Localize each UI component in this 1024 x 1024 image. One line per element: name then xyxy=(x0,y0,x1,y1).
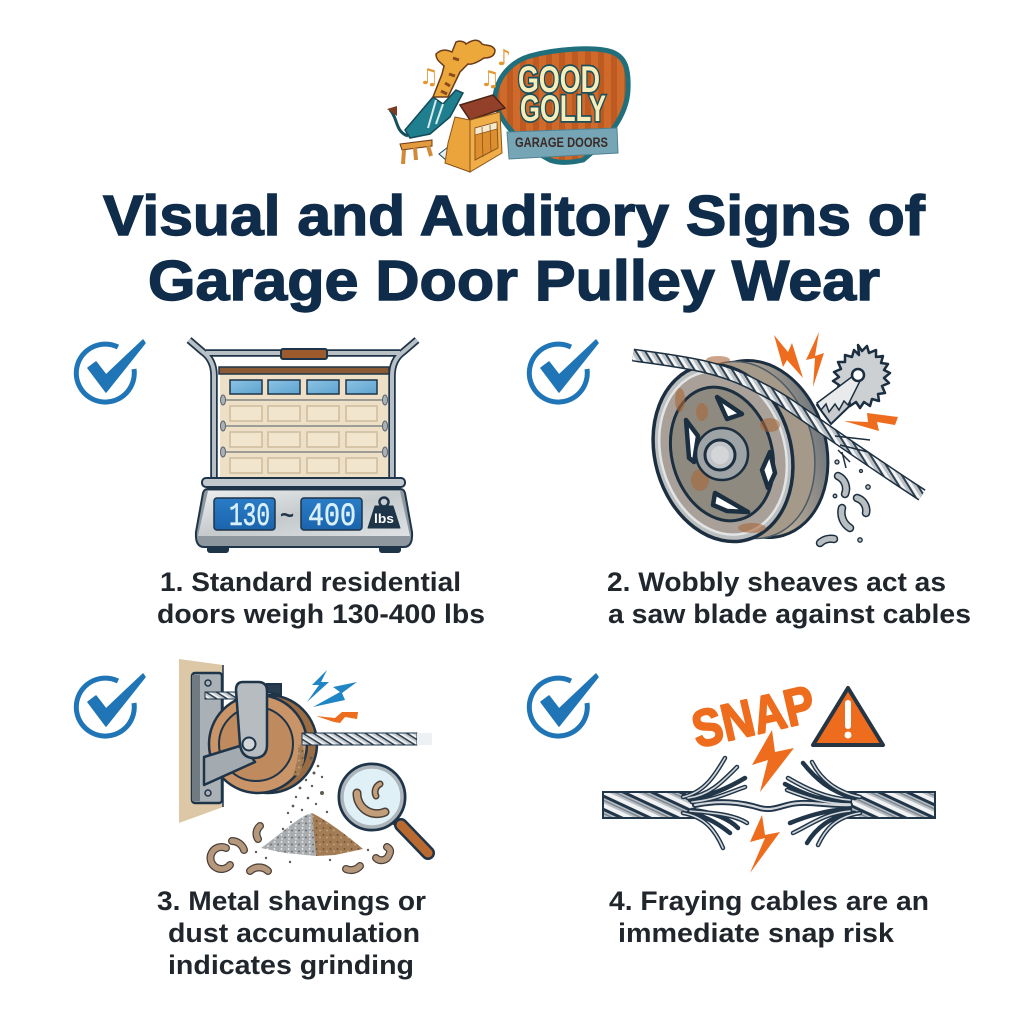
icon: check mark 3 xyxy=(76,674,145,736)
icon: magnifying glass xyxy=(339,764,428,853)
icon: check mark 4 xyxy=(529,674,598,736)
snap label: SNAP xyxy=(687,675,821,760)
icon: pulley on wall bracket xyxy=(179,659,432,823)
icon: frayed cable xyxy=(603,758,935,848)
caption 3: indicates grinding xyxy=(168,950,414,980)
panel 2: wobbly sheaves xyxy=(529,332,971,629)
door windows xyxy=(230,380,377,394)
title: Garage Door Pulley Wear xyxy=(148,249,880,313)
tilde: ~ xyxy=(280,502,294,529)
logo music notes: ♪ xyxy=(497,46,511,71)
icon: noise sparks xyxy=(307,670,358,723)
yoke xyxy=(236,682,267,758)
panel 1: door weight xyxy=(76,340,485,629)
icon: metal fragments xyxy=(820,460,870,543)
caption 4: immediate snap risk xyxy=(618,918,895,948)
logo wordmark xyxy=(518,59,606,129)
panel 4: snap risk xyxy=(529,674,935,948)
dust on pulley xyxy=(293,745,304,776)
icon: pulley wheel xyxy=(633,344,848,558)
icon: sparks xyxy=(774,332,898,431)
wall xyxy=(179,659,223,823)
weight icon lbs: lbs xyxy=(374,511,394,526)
icon: lower lightning xyxy=(750,815,780,873)
wheel hub xyxy=(696,428,748,480)
panel 3: metal shavings xyxy=(76,659,432,980)
yoke arm xyxy=(204,745,255,785)
wheel rust xyxy=(675,356,780,533)
icon: saw blade xyxy=(817,345,890,424)
icon: upper lightning xyxy=(752,730,794,792)
caption 2 xyxy=(607,567,971,629)
icon: falling dust specks xyxy=(255,756,369,863)
scale display low xyxy=(214,498,275,535)
logo music notes: ♫ xyxy=(419,65,439,90)
horizontal cable xyxy=(302,733,417,745)
logo badge xyxy=(495,49,628,162)
caption 4 xyxy=(609,886,929,948)
logo wordmark: GOLLY xyxy=(520,88,606,129)
logo giraffe xyxy=(387,40,495,164)
icon: worn cable xyxy=(633,355,922,495)
door handle bar xyxy=(281,349,327,359)
caption 3: 3. Metal shavings or xyxy=(157,886,427,916)
logo music notes xyxy=(419,46,511,92)
caption 1: 1. Standard residential xyxy=(160,567,461,597)
caption 3 xyxy=(157,886,427,980)
scale platform xyxy=(202,478,405,487)
door tracks xyxy=(189,340,417,478)
scale feet xyxy=(207,545,229,553)
title: Visual and Auditory Signs of xyxy=(103,184,926,248)
scale display high: 400 xyxy=(308,498,356,535)
caption 2: 2. Wobbly sheaves act as xyxy=(607,567,946,597)
logo house xyxy=(445,95,505,172)
icon: check mark 1 xyxy=(76,340,145,402)
scale body xyxy=(196,489,412,547)
door body xyxy=(220,372,388,478)
caption 1 xyxy=(157,567,485,629)
scale display low: 130 xyxy=(229,498,270,535)
caption 3: dust accumulation xyxy=(168,918,420,948)
bracket xyxy=(192,673,222,803)
icon: warning triangle xyxy=(813,688,883,745)
title xyxy=(103,184,926,313)
wheel spoke holes xyxy=(686,397,775,512)
weight icon lbs xyxy=(368,498,400,528)
logo banner: GARAGE DOORS xyxy=(515,135,608,150)
logo: Good Golly Garage Doors xyxy=(387,40,628,172)
logo banner xyxy=(507,128,618,159)
top cable xyxy=(205,692,237,699)
door panels xyxy=(230,406,377,473)
icon: metal shavings xyxy=(210,826,390,871)
icon: check mark 2 xyxy=(529,340,598,402)
icon: garage door on scale xyxy=(189,340,417,553)
caption 1: doors weigh 130-400 lbs xyxy=(157,599,485,629)
icon: dust pile xyxy=(261,813,363,856)
logo music notes: ♫ xyxy=(480,67,500,92)
pulley xyxy=(219,695,317,793)
caption 2: a saw blade against cables xyxy=(608,599,971,629)
logo wordmark: GOOD xyxy=(518,59,600,100)
caption 4: 4. Fraying cables are an xyxy=(609,886,929,916)
